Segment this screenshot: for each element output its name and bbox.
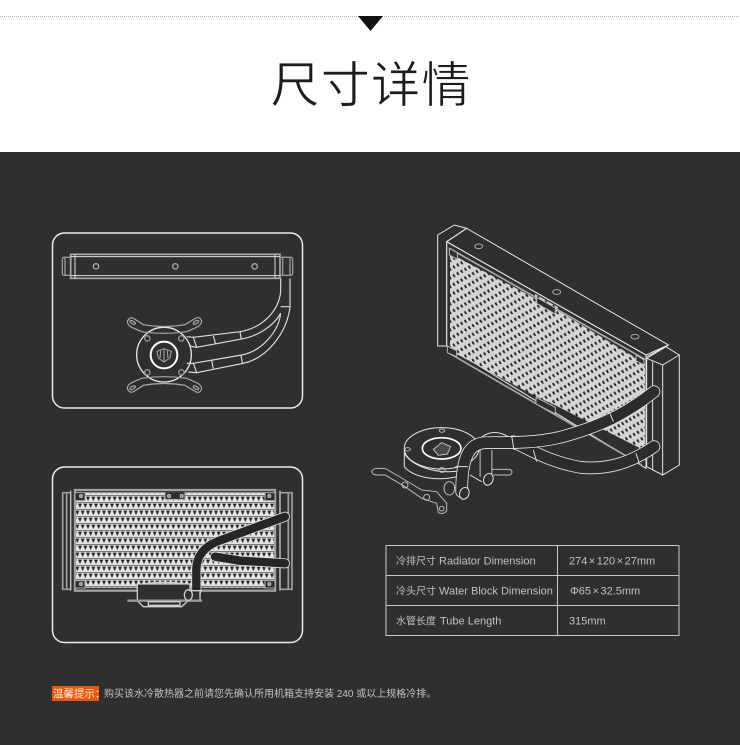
water block (137, 327, 191, 382)
row: water block dimension: Φ65×32.5mm (570, 586, 640, 598)
callout: warm tip: 购买该水冷散热器之前请您先确认所用机箱支持安装 240 或以上规格冷排。 (104, 687, 436, 700)
top dotted divider (0, 16, 740, 18)
isometric cooler illustration (372, 225, 679, 513)
icon: down triangle (358, 16, 383, 31)
title: 尺寸详情 (270, 59, 470, 113)
row: radiator dimension: 274×120×27mm (569, 556, 655, 568)
top view drawing (62, 254, 293, 392)
callout: warm tip: 温馨提示： (53, 687, 106, 700)
tubes (187, 278, 290, 373)
row: radiator dimension (396, 554, 655, 568)
row: radiator dimension: Radiator Dimension (439, 556, 536, 568)
panel: front view (52, 467, 302, 642)
row: water block dimension: 冷头尺寸 (396, 584, 436, 598)
dark background panel (0, 152, 740, 745)
water block side (127, 582, 202, 607)
front view drawing (63, 490, 292, 607)
row: radiator dimension: 冷排尺寸 (396, 554, 436, 568)
mounting bracket (372, 468, 512, 513)
radiator (438, 225, 679, 475)
row: tube length: Tube Length (440, 616, 501, 628)
radiator side (62, 254, 293, 278)
radiator with mesh (63, 490, 292, 591)
table: dimensions (386, 545, 679, 636)
row: tube length (396, 614, 606, 628)
row: water block dimension: Water Block Dimension (439, 586, 553, 598)
tubes (455, 392, 654, 492)
fittings (458, 472, 495, 501)
mounting brackets (127, 318, 202, 392)
callout: warm tip (52, 686, 436, 701)
row: tube length: 水管长度 (396, 614, 436, 628)
tubes (196, 517, 285, 592)
water block (404, 428, 479, 479)
row: water block dimension (396, 584, 640, 598)
panel: top view (52, 233, 302, 408)
row: tube length: 315mm (569, 616, 606, 628)
